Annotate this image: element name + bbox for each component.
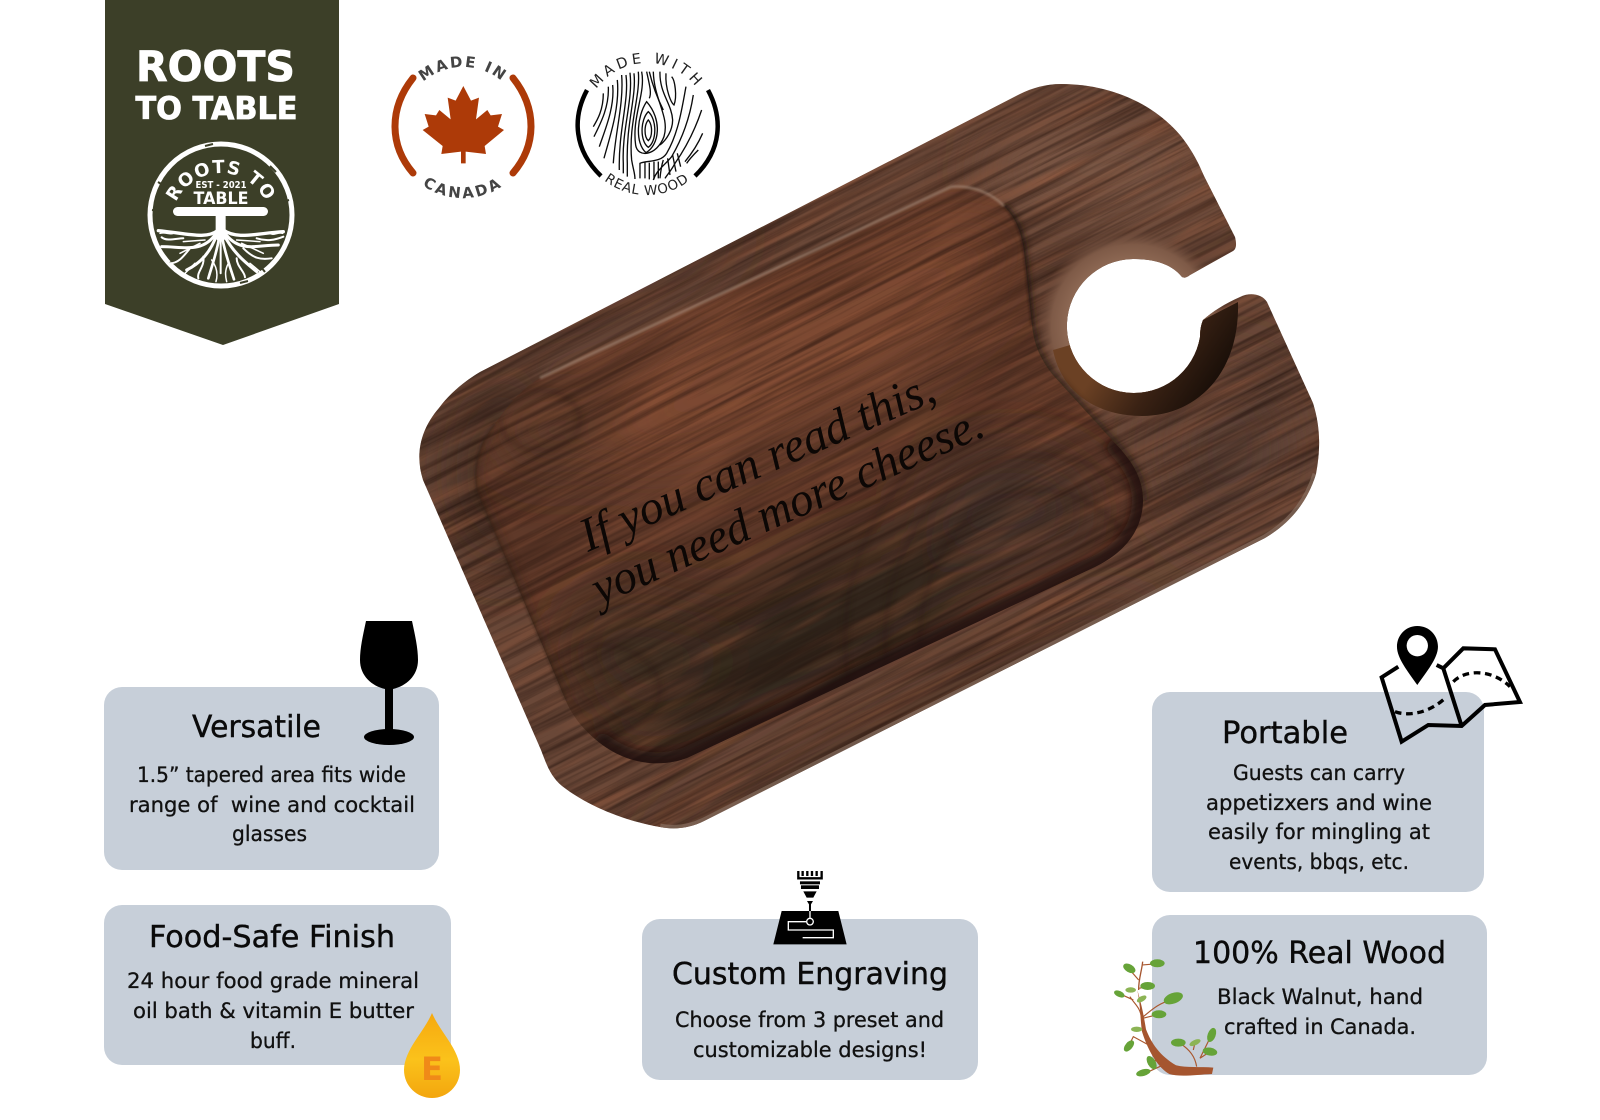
wood grain overlay [419, 84, 1320, 828]
round roots logo: TABLE [194, 189, 248, 209]
brand name: TO TABLE [136, 91, 298, 127]
icon: laser engraver [773, 871, 847, 944]
engraved message: you need more cheese. [579, 397, 992, 617]
badge: made in Canada [392, 56, 534, 198]
panel: 100% real wood [1152, 915, 1487, 1075]
panel: portable: Portable [1222, 716, 1348, 751]
panel: portable: appetizxers and wine [1206, 791, 1432, 815]
badge: made in Canada: CANADA [424, 178, 502, 198]
badge: made in Canada: MADE IN [418, 56, 506, 81]
icon: maple leaf [423, 86, 504, 163]
panel: portable: events, bbqs, etc. [1229, 850, 1409, 874]
badge: made with real wood: MADE WITH [589, 52, 702, 88]
icon: map with pin [1382, 626, 1520, 742]
icon: green branch [1113, 959, 1218, 1078]
panel: custom engraving [642, 919, 978, 1080]
round roots logo [148, 142, 294, 288]
panel: food-safe finish: oil bath & vitamin E butter [133, 999, 414, 1023]
panel: versatile: Versatile [192, 710, 321, 745]
panel: portable [1152, 692, 1484, 892]
panel: custom engraving: Choose from 3 preset and [675, 1008, 944, 1032]
icon: vitamin E oil drop: E [421, 1050, 443, 1088]
panel: versatile: glasses [232, 822, 307, 846]
panel: 100% real wood: Black Walnut, hand [1217, 985, 1423, 1009]
worn lower edge highlight [660, 474, 1316, 828]
brand name: ROOTS [136, 42, 295, 91]
panel: food-safe finish: buff. [250, 1029, 296, 1053]
panel: food-safe finish: Food-Safe Finish [149, 920, 395, 955]
glass hole chamfer [1037, 230, 1238, 422]
panel: 100% real wood: crafted in Canada. [1224, 1015, 1416, 1039]
panel: portable: Guests can carry [1233, 761, 1405, 785]
round roots logo: EST - 2021 [196, 180, 246, 191]
panel: 100% real wood: 100% Real Wood [1193, 936, 1446, 971]
panel: custom engraving: customizable designs! [693, 1038, 927, 1062]
panel: versatile: 1.5” tapered area fits wide [137, 763, 406, 787]
brand banner [105, 0, 339, 345]
icon: wine glass [360, 621, 418, 745]
brand name [136, 42, 298, 127]
engraved message: If you can read this, [570, 361, 943, 562]
icon: vitamin E oil drop [404, 1013, 460, 1098]
recessed tray [474, 184, 1149, 764]
badge: made with real wood: REAL WOOD [605, 173, 687, 196]
panel: versatile: range of wine and cocktail [129, 793, 415, 817]
round roots logo: ROOTS TO [166, 160, 274, 201]
panel: custom engraving: Custom Engraving [672, 957, 948, 992]
product photo: walnut serving board [419, 84, 1320, 828]
growth rings [498, 388, 1124, 589]
panel: food-safe finish: 24 hour food grade mineral [127, 969, 419, 993]
panel: food-safe finish [104, 905, 451, 1065]
panel: portable: easily for mingling at [1208, 820, 1430, 844]
badge: made with real wood [575, 52, 720, 196]
panel: versatile [104, 687, 439, 870]
icon: wood grain [593, 72, 703, 180]
